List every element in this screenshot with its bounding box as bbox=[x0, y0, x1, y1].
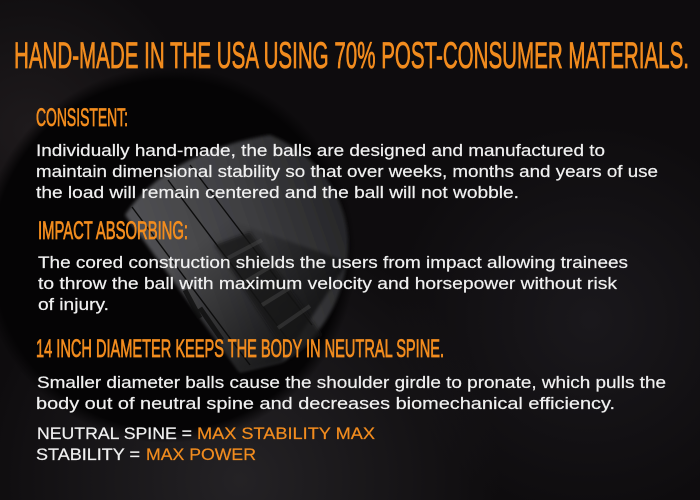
medicine ball bbox=[0, 67, 356, 443]
text block: impact absorbing: of injury. bbox=[38, 295, 109, 314]
callout: neutral spine equation: MAX POWER bbox=[146, 445, 256, 464]
text block: consistent: maintain dimensional stability so that over weeks, months and years of use bbox=[36, 162, 658, 181]
callout: neutral spine equation: STABILITY = bbox=[36, 445, 140, 464]
text block: consistent: the load will remain centered and the ball will not wobble. bbox=[36, 183, 519, 202]
text block: impact absorbing: to throw the ball with maximum velocity and horsepower without risk bbox=[38, 274, 618, 293]
text block: consistent: Individually hand-made, the balls are designed and manufactured to bbox=[36, 141, 605, 160]
text block: diameter bbox=[36, 373, 666, 413]
section: impact absorbing bbox=[38, 217, 628, 314]
text block: consistent bbox=[36, 141, 658, 202]
heading: consistent: CONSISTENT: bbox=[36, 104, 128, 132]
text block: impact absorbing: The cored construction shields the users from impact allowing trainees bbox=[38, 253, 628, 272]
text block: diameter: body out of neutral spine and decreases biomechanical efficiency. bbox=[36, 394, 615, 413]
callout: neutral spine equation bbox=[36, 424, 375, 464]
callout: neutral spine equation: MAX STABILITY MAX bbox=[197, 424, 375, 443]
text block: impact absorbing bbox=[38, 253, 628, 314]
callout: neutral spine equation: NEUTRAL SPINE = bbox=[37, 424, 192, 443]
section: consistent bbox=[36, 104, 658, 202]
text block: diameter: Smaller diameter balls cause the shoulder girdle to pronate, which pulls the bbox=[37, 373, 666, 392]
heading: impact absorbing: IMPACT ABSORBING: bbox=[38, 217, 188, 245]
section: diameter bbox=[36, 335, 666, 464]
